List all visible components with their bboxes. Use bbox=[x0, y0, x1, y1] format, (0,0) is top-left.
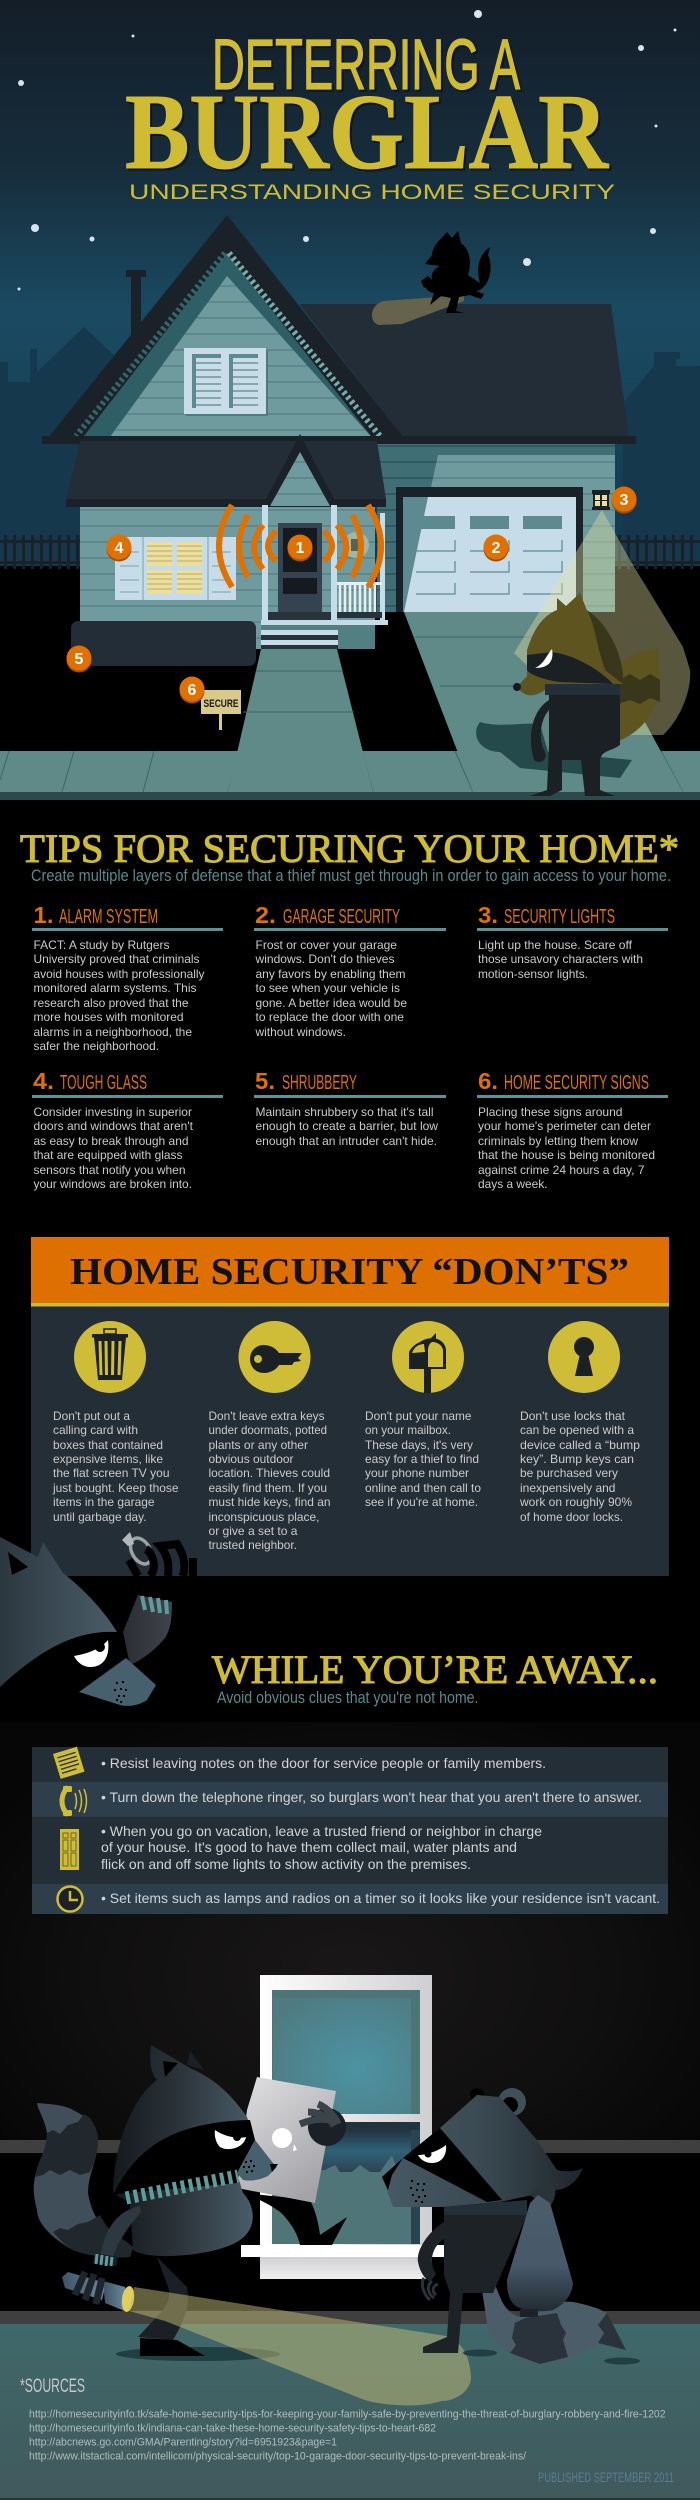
tail ring bbox=[510, 2313, 626, 2364]
tip 4: your windows are broken into. bbox=[34, 1177, 192, 1191]
title bbox=[125, 26, 609, 192]
tip 6 bbox=[477, 1068, 668, 1191]
don't text 2: obvious outdoor bbox=[208, 1452, 294, 1466]
shrubbery bbox=[71, 621, 256, 666]
eave bar bbox=[42, 436, 636, 444]
tip 2: Frost or cover your garage bbox=[256, 938, 397, 952]
icon: trash can bbox=[74, 1321, 146, 1393]
don't text 4: device called a “bump bbox=[520, 1438, 640, 1452]
tip 1: safer the neighborhood. bbox=[34, 1039, 159, 1053]
tip 2: windows. Don't do thieves bbox=[254, 952, 394, 966]
tip 5: enough that an intruder can't hide. bbox=[256, 1134, 437, 1148]
cuff bbox=[142, 1596, 167, 1614]
stars bbox=[18, 10, 676, 290]
away item 3: • When you go on vacation, leave a trusted friend or neighbor in charge bbox=[101, 1823, 542, 1839]
tail bbox=[590, 648, 660, 745]
tip 2: to replace the door with one bbox=[256, 1010, 404, 1024]
don'ts heading: HOME SECURITY “DON’TS” bbox=[70, 1251, 629, 1293]
sidewalk bbox=[0, 751, 700, 800]
don't text 4: can be opened with a bbox=[520, 1423, 634, 1437]
tablet hole bbox=[272, 2128, 292, 2148]
sack knot bbox=[520, 2309, 538, 2317]
source links: http://homesecurityinfo.tk/safe-home-security-tips-for-keeping-your-family-safe-by-preventing-the-threat-of-burglary-robbery-and-fire-1202 bbox=[29, 2408, 666, 2420]
icon: keyhole bbox=[548, 1321, 620, 1393]
sack hand bbox=[530, 2184, 555, 2208]
icon: telephone bbox=[62, 1786, 86, 1816]
right raccoon bbox=[382, 2088, 626, 2364]
wainscot area bbox=[0, 2140, 700, 2500]
tip 4: as easy to break through and bbox=[34, 1134, 188, 1148]
tip 2: to see when your vehicle is bbox=[256, 981, 400, 995]
don't text 4: be purchased very bbox=[520, 1466, 618, 1480]
number badges bbox=[66, 486, 636, 704]
gable shade wall bbox=[80, 253, 375, 441]
tip 6: criminals by letting them know bbox=[478, 1134, 638, 1148]
far hand bbox=[300, 2104, 346, 2146]
tip 4: Consider investing in superior bbox=[34, 1105, 192, 1119]
pupil bbox=[424, 2150, 432, 2158]
neighbouring house silhouettes bbox=[0, 327, 700, 566]
away intro: Avoid obvious clues that you're not home. bbox=[217, 1688, 478, 1707]
don't text 3: on your mailbox. bbox=[365, 1423, 451, 1437]
don't text 4: inexpensively and bbox=[520, 1481, 616, 1495]
chimney bbox=[126, 270, 146, 347]
cuff bbox=[93, 2253, 118, 2266]
source links: http://www.itstactical.com/intellicom/physical-security/top-10-garage-door-security-tips-to-prevent-break-ins/ bbox=[29, 2450, 527, 2462]
don't text 1: Don't put out a bbox=[53, 1409, 130, 1423]
don't text 1 bbox=[52, 1409, 179, 1524]
floor shadow bbox=[116, 2347, 280, 2361]
muzzle bbox=[79, 1658, 156, 1706]
tip 1: FACT: A study by Rutgers bbox=[34, 938, 170, 952]
tip 3: motion-sensor lights. bbox=[478, 967, 588, 981]
tip 4: 4. bbox=[33, 1068, 54, 1094]
don't text 1: calling card with bbox=[53, 1423, 138, 1437]
foot bbox=[140, 2338, 205, 2356]
don't text 2: Don't leave extra keys bbox=[208, 1409, 324, 1423]
tip 6: against crime 24 hours a day, 7 bbox=[478, 1163, 645, 1177]
heading: tips: TIPS FOR SECURING YOUR HOME* bbox=[20, 826, 679, 871]
tip 2: 2. bbox=[255, 902, 276, 928]
eye bbox=[74, 1640, 108, 1667]
garage wing bbox=[377, 444, 615, 612]
cuff stripes bbox=[96, 2254, 112, 2266]
number badges: 2 bbox=[492, 540, 501, 557]
tip 5: SHRUBBERY bbox=[282, 1072, 357, 1094]
heading: while you're away: WHILE YOU’RE AWAY... bbox=[212, 1647, 658, 1692]
ear bbox=[498, 2088, 526, 2116]
tip 4: TOUGH GLASS bbox=[60, 1072, 147, 1094]
number badges: 5 bbox=[75, 651, 84, 668]
ear hole bbox=[8, 1552, 28, 1575]
tear bbox=[293, 2144, 297, 2151]
hand bbox=[422, 2278, 438, 2300]
main gable roof bbox=[48, 215, 404, 438]
hero night sky scene bbox=[0, 0, 700, 800]
second ear bbox=[187, 2051, 204, 2070]
don't text 2: trusted neighbor. bbox=[208, 1538, 297, 1552]
tip 6: your home's perimeter can deter bbox=[478, 1119, 651, 1133]
tablet pane bbox=[237, 2077, 336, 2203]
number badges: 3 bbox=[620, 492, 629, 509]
don't text 2: easily find them. If you bbox=[208, 1481, 327, 1495]
tip 2: any favors by enabling them bbox=[256, 967, 406, 981]
don't text 3: your phone number bbox=[365, 1466, 469, 1480]
mask bbox=[382, 2128, 502, 2202]
tip 1: ALARM SYSTEM bbox=[59, 906, 158, 928]
house front wall bbox=[80, 505, 375, 649]
icon: door bbox=[60, 1829, 79, 1870]
gripping fingers bbox=[75, 2272, 102, 2304]
nose bbox=[513, 683, 521, 691]
number badges: 1 bbox=[296, 540, 305, 557]
tip 3: SECURITY LIGHTS bbox=[504, 906, 615, 928]
don't text 1: until garbage day. bbox=[53, 1510, 146, 1524]
don't text 2: plants or any other bbox=[208, 1438, 308, 1452]
don't text 3: These days, it's very bbox=[365, 1438, 473, 1452]
eye bbox=[215, 2130, 246, 2149]
tip 1 bbox=[32, 902, 223, 1053]
tip 5 bbox=[254, 1068, 446, 1148]
ear hole bbox=[163, 2061, 178, 2077]
garage door bbox=[396, 487, 583, 612]
lower wall backdrop bbox=[0, 1722, 700, 2182]
ring bbox=[122, 1532, 156, 1568]
tip 4: doors and windows that aren't bbox=[34, 1119, 194, 1133]
tip 4: sensors that notify you when bbox=[34, 1163, 186, 1177]
tip 4: that are equipped with glass bbox=[34, 1148, 182, 1162]
muzzle bbox=[237, 2140, 277, 2181]
scarf bbox=[126, 2176, 238, 2198]
porch light bbox=[343, 532, 369, 558]
yellow header line bbox=[31, 1303, 669, 1306]
tail bbox=[480, 2273, 626, 2364]
don't text 4: key”. Bump keys can bbox=[520, 1452, 634, 1466]
body bbox=[113, 2045, 255, 2256]
don't text 2: must hide keys, find an bbox=[208, 1495, 330, 1509]
don't text 3: Don't put your name bbox=[365, 1409, 472, 1423]
number badges: 4 bbox=[115, 540, 124, 557]
panel: home security don'ts bbox=[31, 1237, 669, 1576]
flashlight beam bbox=[129, 2287, 471, 2406]
left raccoon bbox=[34, 2045, 346, 2361]
don't text 3: online and then call to bbox=[365, 1481, 481, 1495]
tip 5: Maintain shrubbery so that it's tall bbox=[256, 1105, 434, 1119]
tip 3: those unsavory characters with bbox=[478, 952, 643, 966]
tip 3 bbox=[477, 902, 668, 981]
right raccoon shadows bbox=[463, 2350, 640, 2364]
alarm waves bbox=[219, 505, 381, 587]
tip 5: enough to create a barrier, but low bbox=[256, 1119, 438, 1133]
number badges: 6 bbox=[188, 682, 197, 699]
away item 1: • Resist leaving notes on the door for service people or family members. bbox=[101, 1755, 546, 1771]
porch posts and rail bbox=[261, 505, 388, 625]
gable lit wall bbox=[107, 276, 375, 441]
tail bbox=[34, 2103, 133, 2257]
right roof bbox=[299, 304, 629, 438]
gable window bbox=[184, 348, 268, 416]
black hand and leg in window bbox=[243, 2193, 347, 2245]
wall lantern bbox=[592, 490, 610, 510]
don't text 2: or give a set to a bbox=[208, 1524, 298, 1538]
tip 2: GARAGE SECURITY bbox=[283, 906, 400, 928]
title: BURGLAR bbox=[125, 73, 609, 192]
away item 3 bbox=[101, 1823, 542, 1872]
tip 4 bbox=[32, 1068, 223, 1191]
flashlight bbox=[62, 2272, 136, 2313]
tip 2 bbox=[254, 902, 446, 1039]
tip 3: Light up the house. Scare off bbox=[478, 938, 633, 952]
don't text 4: of home door locks. bbox=[520, 1510, 623, 1524]
don't text 3: easy for a thief to find bbox=[365, 1452, 479, 1466]
don't text 2 bbox=[208, 1409, 330, 1552]
street light cone bbox=[514, 510, 690, 735]
collar bbox=[545, 684, 620, 695]
source links bbox=[29, 2408, 666, 2462]
don't text 1: boxes that contained bbox=[53, 1438, 163, 1452]
tip 2: without windows. bbox=[255, 1025, 346, 1039]
arm bbox=[531, 700, 549, 762]
body bbox=[423, 2215, 527, 2353]
back ear bbox=[470, 2088, 484, 2102]
rooftop burglar beam bbox=[372, 295, 464, 325]
don't text 4 bbox=[519, 1409, 640, 1524]
mask bbox=[527, 652, 613, 684]
head bbox=[0, 1537, 117, 1687]
window bbox=[241, 1975, 444, 2279]
rooftop burglar silhouette bbox=[421, 231, 491, 313]
tip 1: University proved that criminals bbox=[34, 952, 200, 966]
front door bbox=[278, 523, 322, 615]
icon: mailbox bbox=[392, 1321, 464, 1393]
porch steps bbox=[261, 625, 375, 649]
peeking raccoon bbox=[0, 1532, 193, 1706]
don't text 3 bbox=[365, 1409, 481, 1509]
title: DETERRING A bbox=[212, 26, 520, 105]
tip 6: 6. bbox=[478, 1068, 498, 1094]
tip 1: alarms in a neighborhood, the bbox=[34, 1025, 192, 1039]
source links: http://abcnews.go.com/GMA/Parenting/story?id=6951923&page=1 bbox=[29, 2436, 337, 2448]
away item 3: flick on and off some lights to show activity on the premises. bbox=[101, 1856, 471, 1872]
icon: clock bbox=[58, 1886, 82, 1912]
sources heading: *SOURCES bbox=[20, 2376, 85, 2397]
arm bbox=[418, 2222, 446, 2282]
tip 6: Placing these signs around bbox=[478, 1105, 622, 1119]
tip 1: 1. bbox=[34, 902, 54, 928]
neck band bbox=[444, 2200, 527, 2215]
don't text 4: Don't use locks that bbox=[520, 1409, 626, 1423]
fences bbox=[0, 535, 700, 569]
ground bbox=[0, 566, 700, 800]
tip 1: avoid houses with professionally bbox=[34, 967, 204, 981]
tip 5: 5. bbox=[255, 1068, 275, 1094]
tip 2: gone. A better idea would be bbox=[256, 996, 407, 1010]
subtitle: UNDERSTANDING HOME SECURITY bbox=[129, 181, 615, 204]
forearm bbox=[123, 1595, 172, 1665]
near arm bbox=[100, 2206, 141, 2260]
mask bbox=[113, 2120, 255, 2195]
whisker dots bbox=[114, 1682, 127, 1702]
don't text 2: under doormats, potted bbox=[208, 1423, 327, 1437]
driveway shadow bbox=[476, 722, 632, 778]
panel: away list bbox=[32, 1747, 668, 1914]
security sign: SECURE bbox=[204, 698, 238, 710]
security sign bbox=[201, 690, 241, 730]
tip 1: more houses with monitored bbox=[34, 1010, 184, 1024]
whisker dots bbox=[410, 2181, 426, 2202]
tip 3: 3. bbox=[478, 902, 498, 928]
tip 1: research also proved that the bbox=[34, 996, 189, 1010]
pupil bbox=[233, 2133, 241, 2141]
nose bbox=[270, 2164, 278, 2172]
icon: key bbox=[238, 1321, 310, 1393]
fingers bbox=[129, 1544, 193, 1576]
don't text 2: location. Thieves could bbox=[208, 1466, 330, 1480]
don't text 1: items in the garage bbox=[53, 1495, 155, 1509]
don't text 1: just bought. Keep those bbox=[52, 1481, 179, 1495]
tip 6: that the house is being monitored bbox=[478, 1148, 655, 1162]
orange header band bbox=[31, 1237, 669, 1303]
eye bbox=[418, 2145, 446, 2163]
bottom scene bbox=[0, 1975, 700, 2500]
porch roof bbox=[66, 434, 386, 507]
leg bbox=[138, 2257, 188, 2340]
head shade bbox=[587, 610, 623, 684]
tail rings bbox=[35, 2114, 133, 2257]
don't text 4: work on roughly 90% bbox=[519, 1495, 632, 1509]
icon: note bbox=[53, 1747, 85, 1779]
driveway and front walk bbox=[228, 612, 683, 792]
head bbox=[517, 593, 623, 695]
don't text 1: expensive items, like bbox=[53, 1452, 163, 1466]
source links: http://homesecurityinfo.tk/indiana-can-take-these-home-security-safety-tips-to-heart-682 bbox=[29, 2422, 436, 2434]
tip 6: days a week. bbox=[478, 1177, 548, 1191]
away item 3: of your house. It's good to have them collect mail, water plants and bbox=[101, 1839, 517, 1855]
head bbox=[382, 2095, 583, 2207]
raccoon by the driveway bbox=[513, 593, 660, 796]
lit front window bbox=[115, 537, 236, 600]
don't text 3: see if you're at home. bbox=[365, 1495, 478, 1509]
sack bbox=[507, 2195, 573, 2311]
away item 2: • Turn down the telephone ringer, so burglars won't hear that you aren't there to answer. bbox=[101, 1789, 642, 1805]
pupil bbox=[95, 1642, 105, 1652]
whisker dots bbox=[243, 2161, 255, 2172]
rafter tails bbox=[76, 253, 380, 436]
don't text 1: the flat screen TV you bbox=[53, 1466, 170, 1480]
don't text 2: inconspicuous place, bbox=[208, 1510, 320, 1524]
eye bbox=[535, 649, 552, 668]
body and legs bbox=[530, 694, 620, 796]
tip 1: monitored alarm systems. This bbox=[34, 981, 196, 995]
away item 4: • Set items such as lamps and radios on a timer so it looks like your residence isn't vacant. bbox=[101, 1890, 660, 1906]
